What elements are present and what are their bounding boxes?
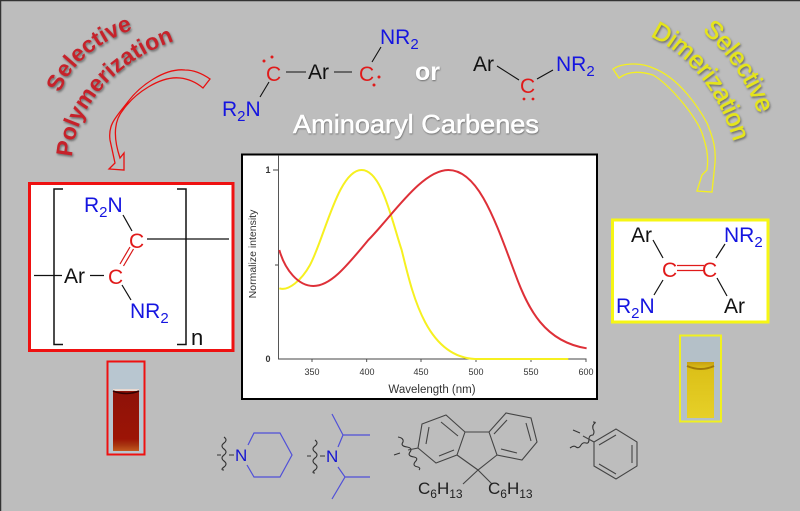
brackets — [54, 189, 186, 344]
heading: Selective Polymerization: Polymerization — [56, 31, 174, 158]
substituent: dihexylfluorenyl: 13 — [449, 487, 463, 501]
panel: polymer structure: n — [191, 325, 203, 350]
molecule: aminoaryl bis-carbene: 2 — [237, 108, 246, 125]
panel: dimer structure: 2 — [631, 305, 640, 322]
panel: polymer structure: Ar — [64, 265, 85, 288]
substituent: piperidine: N — [235, 446, 247, 465]
cuvette: yellow solution — [680, 336, 721, 422]
axes — [273, 155, 586, 362]
text: or: or — [415, 58, 440, 86]
molecule: aminoaryl carbene — [473, 53, 595, 100]
title: Aminoaryl Carbenes: Aminoaryl Carbenes — [293, 109, 539, 139]
arrow: yellow curved — [613, 64, 715, 192]
panel: dimer structure: R — [616, 295, 631, 318]
heading: Selective Polymerization: Selective — [47, 20, 133, 94]
bonds — [34, 215, 229, 300]
panel: polymer structure: N — [108, 194, 123, 217]
molecule: aminoaryl carbene: Ar — [473, 53, 494, 76]
axis labels: 1 — [265, 165, 271, 175]
substituent: dihexylfluorenyl — [394, 413, 537, 501]
molecule: aminoaryl bis-carbene — [222, 26, 419, 125]
molecule: aminoaryl bis-carbene: Ar — [308, 61, 329, 84]
substituent: piperidine — [217, 433, 292, 477]
molecule: aminoaryl carbene: 2 — [586, 63, 595, 80]
heading: Selective Dimerization: Selective — [704, 20, 772, 114]
molecule: aminoaryl bis-carbene: N — [246, 98, 261, 121]
axis labels: 350 — [304, 367, 320, 377]
panel: spectrum chart — [242, 154, 597, 399]
panel: polymer structure — [30, 184, 233, 350]
molecule: aminoaryl carbene: C — [520, 75, 535, 98]
substituent: dihexylfluorenyl: C — [488, 479, 500, 498]
lone pairs — [262, 60, 266, 62]
molecule: aminoaryl bis-carbene: NR — [380, 26, 410, 49]
axis labels: 0 — [265, 354, 271, 364]
panel: polymer structure: 2 — [160, 310, 169, 327]
bonds — [653, 240, 727, 296]
panel: dimer structure: NR — [724, 224, 754, 247]
panel: dimer structure: Ar — [631, 224, 652, 247]
panel: polymer structure: C — [129, 230, 144, 253]
panel: dimer structure — [612, 220, 768, 322]
axis labels: 550 — [523, 367, 539, 377]
panel: dimer structure: C — [662, 259, 677, 282]
axis labels: 450 — [413, 367, 429, 377]
substituent: dihexylfluorenyl: H — [437, 479, 449, 498]
panel: dimer structure: C — [702, 259, 717, 282]
panel: polymer structure: NR — [130, 300, 160, 323]
molecule: aminoaryl bis-carbene: C — [266, 63, 281, 86]
molecule: aminoaryl bis-carbene: R — [222, 98, 237, 121]
molecule: aminoaryl bis-carbene: C — [359, 63, 374, 86]
substituent: dihexylfluorenyl: C — [418, 479, 430, 498]
panel: dimer structure: Ar — [724, 295, 745, 318]
heading: Selective Dimerization: Dimerization — [652, 21, 748, 143]
panel: polymer structure: 2 — [99, 204, 108, 221]
substituent: diisopropylamino: N — [326, 447, 338, 466]
substituent: dihexylfluorenyl: 6 — [430, 487, 437, 501]
curve: red — [279, 170, 587, 348]
axis labels: 400 — [359, 367, 375, 377]
axis labels: 600 — [578, 367, 594, 377]
panel: polymer structure: C — [108, 266, 123, 289]
curve: yellow — [279, 170, 568, 359]
arrow: red curved — [109, 70, 210, 170]
axis labels: 500 — [468, 367, 484, 377]
bonds — [260, 47, 381, 97]
substituent: diisopropylamino — [307, 414, 370, 499]
axis labels: Normalize intensity — [247, 209, 259, 298]
panel: dimer structure: N — [640, 295, 655, 318]
panel: polymer structure: R — [84, 194, 99, 217]
substituent: dihexylfluorenyl: 6 — [500, 487, 507, 501]
cuvette: red solution — [108, 362, 144, 454]
substituent: dihexylfluorenyl: H — [507, 479, 519, 498]
axis labels: Wavelength (nm) — [388, 384, 476, 396]
panel: dimer structure: 2 — [754, 234, 763, 251]
substituent: dihexylfluorenyl: 13 — [519, 487, 533, 501]
molecule: aminoaryl carbene: NR — [556, 53, 586, 76]
substituent: phenyl — [570, 422, 637, 479]
axis labels — [247, 165, 594, 396]
molecule: aminoaryl bis-carbene: 2 — [410, 36, 419, 53]
